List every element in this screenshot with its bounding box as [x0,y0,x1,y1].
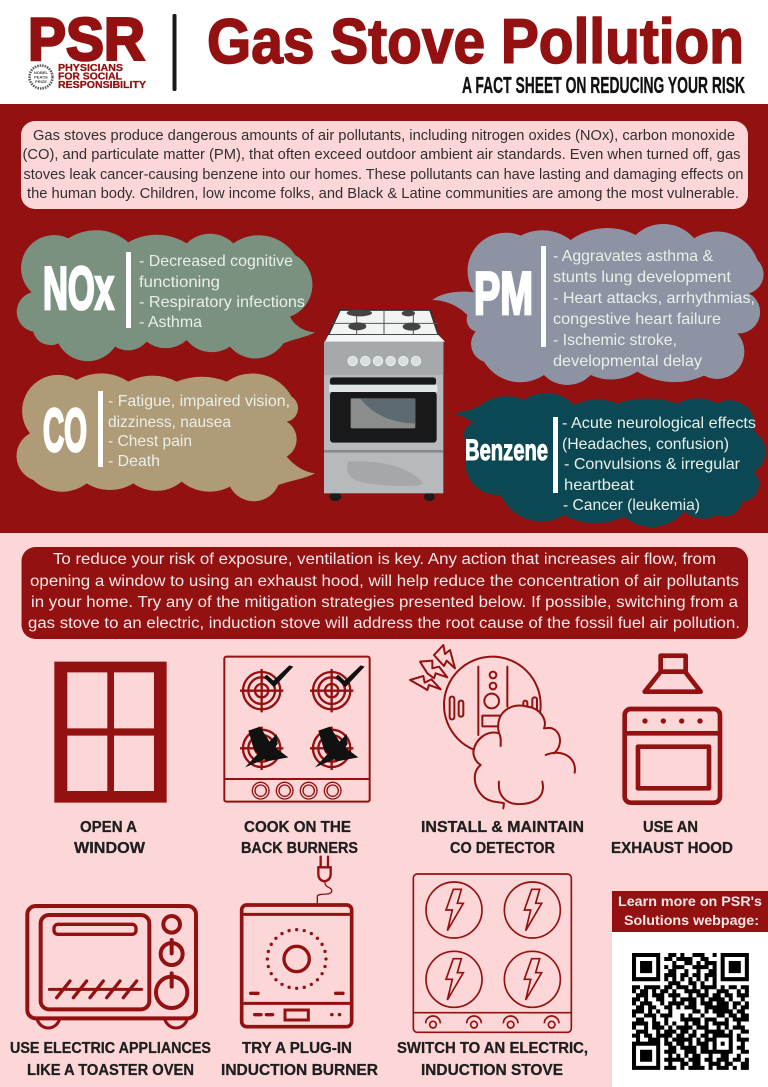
intro text box: Gas stoves produce dangerous amounts of air pollutants, including nitrogen oxides (NOx), carbon monoxide [33,127,735,144]
icon: CO detector [410,645,575,808]
label: cook on the back burners: BACK BURNERS [241,840,358,857]
label: NOx: NOx [43,255,114,322]
label: try a plug-in induction burner: TRY A PLUG-IN [242,1040,352,1057]
NOx effects: - Asthma [139,314,202,331]
Benzene effects: (Headaches, confusion) [562,436,729,453]
label: use an exhaust hood: EXHAUST HOOD [611,840,733,857]
PM effects: developmental delay [553,353,702,370]
callout: CO: CO [43,397,87,464]
learn more banner [612,891,768,932]
ventilation text box: To reduce your risk of exposure, ventilation is key. Any action that increases air flow, from [53,551,716,568]
callout: CO [17,373,315,501]
Benzene effects: - Convulsions & irregular [564,456,741,473]
PSR logo: FOR SOCIAL [58,72,122,82]
label: try a plug-in induction burner: INDUCTION BURNER [221,1062,378,1079]
PSR logo: PSR [28,6,145,73]
ventilation text box [22,547,748,639]
CO effects: - Chest pain [108,433,192,450]
icon: exhaust hood and oven [625,656,720,803]
label: cook on the back burners: COOK ON THE [244,819,351,836]
label: install and maintain CO detector: CO DETECTOR [450,840,555,857]
NOx effects: - Decreased cognitive [139,253,293,270]
PSR logo: NOBEL [34,70,49,75]
CO effects: dizziness, nausea [108,414,231,431]
label: try a plug-in induction burner [221,1040,378,1079]
PM effects: - Heart attacks, arrhythmias, [553,290,755,307]
NOx effects: functioning [139,274,220,291]
icon: stove back burners [224,657,370,802]
PM effects: - Aggravates asthma & [553,248,713,265]
NOx effects: - Respiratory infections [139,294,305,311]
label: install and maintain CO detector [421,819,584,857]
ventilation text box: in your home. Try any of the mitigation strategies presented below. If possible, switching from a [31,594,738,611]
CO effects: - Death [108,453,160,470]
PM effects: stunts lung development [553,269,732,286]
Benzene effects: - Cancer (leukemia) [563,497,700,514]
label: open a window: OPEN A [80,819,137,836]
label: use an exhaust hood: USE AN [643,819,698,836]
label: open a window: WINDOW [74,840,145,857]
PSR logo: RESPONSIBILITY [58,80,146,91]
intro text box [21,121,748,209]
label: cook on the back burners [241,819,358,857]
intro text box: the human body. Children, low income folks, and Black & Latine communities are among the most vulnerable. [27,185,739,202]
icon: toaster oven [27,906,196,1028]
label: switch to an electric induction stove: SWITCH TO AN ELECTRIC, [397,1040,588,1057]
icon: plug-in induction burner [242,857,352,1027]
learn more banner: Learn more on PSR's [618,893,762,909]
intro text box: stoves leak cancer-causing benzene into our homes. These pollutants can have lasting and damaging effects on [24,166,744,183]
Benzene effects [562,415,756,514]
CO effects: - Fatigue, impaired vision, [108,393,290,410]
label: PM: PM [474,260,533,327]
PM effects: - Ischemic stroke, [553,332,677,349]
panel: pollutants [0,104,768,533]
callout: PM [432,224,764,385]
icon: gas stove [324,310,445,501]
icon: electric induction stove [413,874,571,1032]
PSR logo: PEACE [34,74,48,80]
Benzene effects: - Acute neurological effects [562,415,756,432]
icon: window [54,662,167,803]
label: open a window [74,819,145,857]
PM effects: congestive heart failure [553,311,721,328]
PM effects [553,248,755,370]
label: use electric appliances: USE ELECTRIC APPLIANCES [10,1040,211,1057]
label: use electric appliances [10,1040,211,1079]
label: install and maintain CO detector: INSTALL & MAINTAIN [421,819,584,836]
label: Benzene: Benzene [465,434,548,467]
callout: Benzene [452,393,766,527]
header [0,0,768,104]
PSR logo: PRIZE [35,79,47,84]
panel: learn more and QR code [612,891,768,1087]
label: switch to an electric induction stove [397,1040,588,1079]
label: use an exhaust hood [611,819,733,857]
label: switch to an electric induction stove: INDUCTION STOVE [421,1062,563,1079]
learn more banner: Solutions webpage: [624,912,759,928]
CO effects [108,393,290,470]
ventilation text box: gas stove to an electric, induction stove will address the root cause of the fossil fuel air pollution. [28,615,740,632]
Benzene effects: heartbeat [564,477,635,494]
callout: NOx [17,230,315,361]
intro text box: (CO), and particulate matter (PM), that often exceed outdoor ambient air standards. Even when turned off, gas [22,146,740,163]
PSR logo: PHYSICIANS [58,63,123,74]
label: use electric appliances: LIKE A TOASTER OVEN [27,1062,194,1079]
QR code [632,955,749,1068]
ventilation text box: opening a window to using an exhaust hood, will help reduce the concentration of air pollutants [30,573,739,590]
NOx effects [139,253,305,331]
